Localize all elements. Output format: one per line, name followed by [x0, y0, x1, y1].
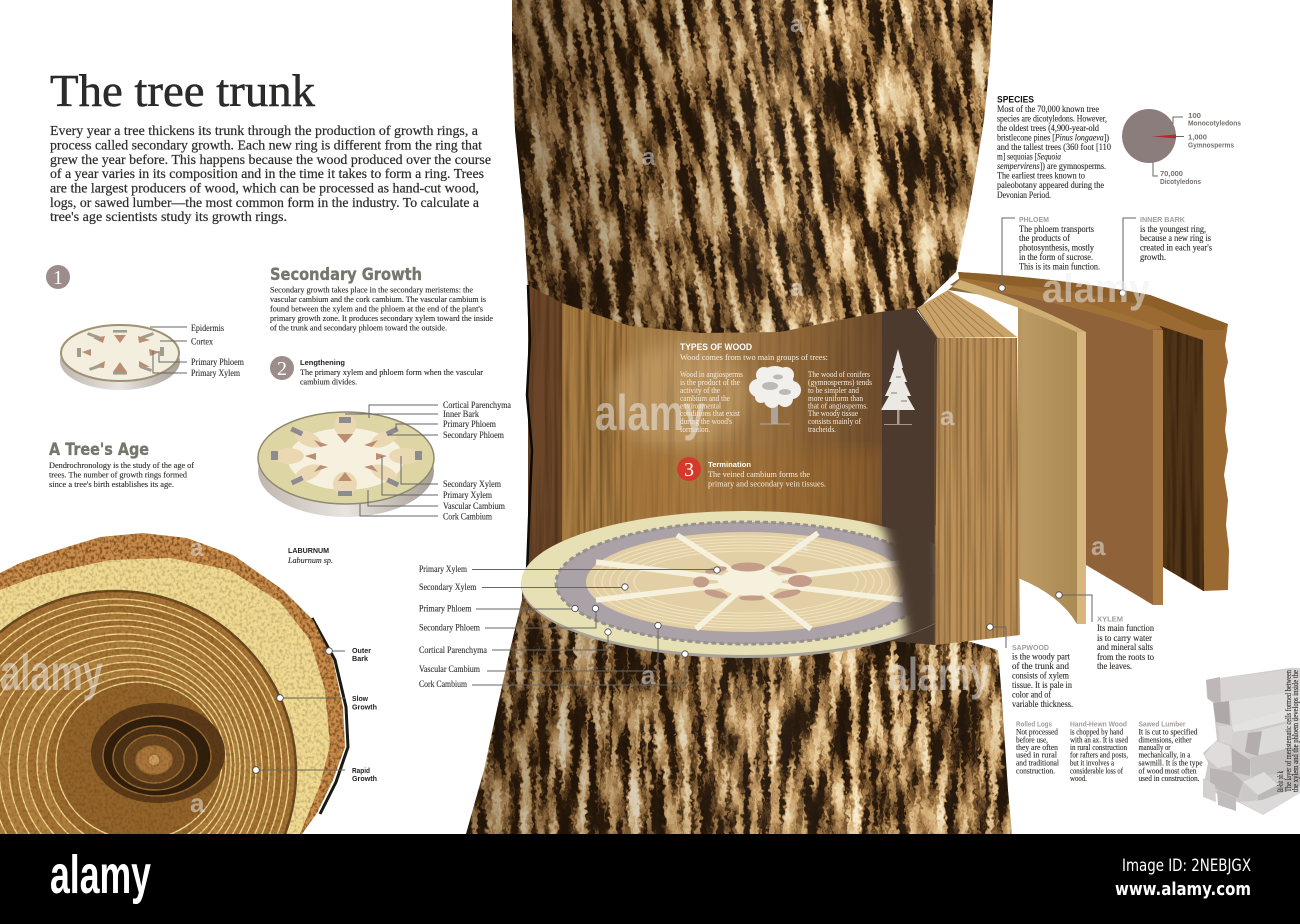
labels disc 2 — [443, 400, 511, 522]
text: hand-hewn wood: with an ax. It is used — [1070, 736, 1128, 744]
text: hand-hewn wood: but it involves a — [1070, 758, 1114, 768]
species text: sempervirens]) are gymnosperms. — [997, 161, 1106, 171]
illustration: stacked lumber — [1203, 668, 1300, 815]
panel: tree ring cross-section — [0, 533, 377, 834]
secondary growth text — [270, 286, 493, 332]
label: Laburnum — [287, 546, 333, 565]
intro text block: logs, or sawed lumber—the most common form in the industry. To calculate a — [50, 196, 480, 211]
ring callouts: Slow — [352, 694, 368, 703]
label: Epidermis: Epidermis — [191, 323, 224, 333]
callout: sapwood — [987, 624, 1073, 709]
callout: inner bark: because a new ring is — [1140, 233, 1211, 243]
heading: Secondary Growth: Secondary Growth — [270, 265, 422, 285]
conifer text: consists mainly of — [808, 417, 861, 426]
lengthening text — [300, 358, 483, 386]
badge 1 — [46, 265, 70, 289]
trunk disc callouts: Primary Phloem — [419, 604, 472, 614]
callout: xylem: is to carry water — [1097, 633, 1152, 643]
xylem layer — [948, 280, 1086, 624]
cutaway left black edge — [526, 285, 532, 600]
watermarks: alamy — [0, 645, 103, 701]
callout: sapwood: consists of xylem — [1012, 670, 1069, 680]
pie chart: tree species: Monocotyledons — [1188, 118, 1241, 128]
callout: sapwood: is the woody part — [1012, 652, 1070, 662]
text: hand-hewn wood — [1070, 720, 1128, 783]
leader lines disc 1 — [150, 327, 187, 373]
badge 1: 1 — [53, 267, 63, 289]
icon: conifer tree — [881, 349, 915, 424]
species text: m] sequoias [Sequoia — [997, 152, 1061, 162]
text: sawed lumber: Sawed Lumber — [1138, 720, 1186, 728]
callout: xylem: and mineral salts — [1097, 642, 1153, 652]
disc 2 drawing — [258, 412, 434, 517]
upper trunk bark — [512, 0, 993, 333]
callout: xylem — [1056, 592, 1154, 671]
slab rings — [0, 533, 345, 834]
callout: inner bark: is the youngest ring, — [1140, 224, 1206, 234]
footer bar — [0, 834, 1300, 924]
callout: xylem: XYLEM — [1097, 614, 1123, 624]
labels disc 2: Cork Cambium — [443, 512, 492, 522]
ring callouts: Outer — [352, 646, 371, 655]
angiosperm text: conditions that exist — [680, 409, 741, 418]
panel: peeled wood layers — [917, 272, 1229, 648]
intro text block: are the largest producers of wood, which can be processed as hand-cut wood, — [50, 182, 479, 196]
species text: Devonian Period. — [997, 190, 1051, 200]
labels disc 2: Vascular Cambium — [443, 501, 505, 511]
watermarks: a — [1091, 531, 1106, 561]
secondary growth text: primary growth zone. It produces secondary xylem toward the inside — [270, 314, 493, 323]
phloem layer — [950, 278, 1163, 605]
tree age text — [49, 461, 194, 489]
badge 3: 3 — [684, 459, 694, 481]
text: sawed lumber — [1138, 720, 1203, 783]
callout: phloem: photosynthesis, mostly — [1019, 242, 1094, 252]
text: rolled logs: used in rural — [1016, 750, 1058, 760]
title: The tree trunk — [50, 65, 315, 116]
watermarks: a — [790, 275, 804, 302]
badge 3 — [677, 457, 701, 481]
badge 2: 2 — [277, 358, 287, 380]
trunk disc callouts: Secondary Xylem — [419, 582, 476, 592]
panel: types of wood — [677, 342, 915, 488]
text: rolled logs: they are often — [1016, 743, 1058, 752]
trunk disc callouts: Primary Xylem — [419, 564, 467, 574]
angiosperm text: formation. — [680, 425, 710, 434]
tree age text: trees. The number of growth rings formed — [49, 470, 187, 480]
text: sawed lumber: manually or — [1138, 743, 1171, 752]
trunk disc callouts — [419, 564, 720, 689]
watermarks — [0, 11, 1151, 818]
text: sawed lumber: of wood most often — [1138, 766, 1196, 776]
text: rolled logs: and traditional — [1016, 758, 1060, 768]
species text: Most of the 70,000 known tree — [997, 104, 1099, 114]
intro text block: of a year varies in its composition and in the time it takes to form a ring. Trees — [50, 167, 484, 182]
label: Primary Xylem: Primary Xylem — [191, 368, 240, 378]
watermarks: a — [795, 530, 809, 557]
species text: species are dicotyledons. However, — [997, 114, 1107, 124]
pie chart: tree species — [1122, 109, 1241, 186]
callout: inner bark: growth. — [1140, 252, 1166, 262]
pie chart: tree species: Dicotyledons — [1160, 177, 1201, 186]
angiosperm text: is the product of the — [680, 378, 740, 387]
conifer text: tracheids. — [808, 425, 836, 434]
watermarks: alamy — [595, 385, 705, 441]
site url: www.alamy.com — [1115, 879, 1251, 900]
text: sawed lumber: dimensions, either — [1138, 736, 1192, 744]
lengthening text: The primary xylem and phloem form when the vascular — [300, 368, 483, 377]
bark layer — [958, 272, 1229, 594]
rotated note — [1276, 670, 1300, 792]
watermarks: a — [940, 401, 955, 431]
callout: phloem: the products of — [1019, 233, 1070, 243]
text: sawed lumber: used in construction. — [1138, 774, 1200, 783]
panel: stage 1 diagram — [60, 323, 244, 390]
termination text: The veined cambium forms the — [708, 470, 810, 479]
pie chart: tree species: 70,000 — [1160, 169, 1183, 178]
callout: sapwood: variable thickness. — [1012, 699, 1073, 709]
conifer text: (gymnosperms) tends — [808, 378, 872, 387]
watermarks: alamy — [1042, 267, 1151, 311]
labels disc 2: Secondary Xylem — [443, 479, 501, 489]
trunk disc callouts: Secondary Phloem — [419, 622, 480, 632]
text: rolled logs — [1016, 720, 1060, 776]
text: rolled logs: Rolled Logs — [1016, 720, 1052, 728]
angiosperm text: cambium and the — [680, 394, 730, 403]
callout: inner bark: created in each year's — [1140, 242, 1212, 252]
callout: sapwood: tissue. It is pale in — [1012, 680, 1072, 690]
angiosperm text: activity of the — [680, 386, 720, 395]
callout: xylem: Its main function — [1097, 623, 1154, 633]
intro text block: tree's age scientists study its growth rings. — [50, 210, 287, 225]
angiosperm text: environmental — [680, 402, 722, 410]
labels disc 2: Secondary Phloem — [443, 430, 504, 440]
text: hand-hewn wood: is chopped by hand — [1070, 728, 1123, 736]
ring callouts — [253, 646, 377, 783]
intro text block: grew the year before. This happens because the wood produced over the course — [50, 153, 491, 168]
callout: xylem: the leaves. — [1097, 661, 1132, 671]
trunk disc callouts: Vascular Cambium — [419, 664, 480, 674]
sapwood block — [917, 290, 1023, 648]
species text — [997, 94, 1111, 200]
callout: sapwood: of the trunk and — [1012, 661, 1069, 671]
text: hand-hewn wood: in rural construction — [1070, 743, 1127, 752]
panel: stage 2 diagram — [258, 400, 511, 522]
text: sawed lumber: It is cut to specified — [1138, 728, 1198, 736]
species text: and the tallest trees (360 foot [110 — [997, 142, 1111, 152]
angiosperm text: Wood in angiosperms — [680, 370, 743, 379]
conifer text: more uniform than — [808, 394, 863, 403]
labels disc 2: Primary Xylem — [443, 490, 492, 500]
species text: bristlecone pines [Pinus longaeva]) — [997, 132, 1109, 142]
leader lines disc 2 — [345, 405, 438, 516]
cutaway interior walls — [528, 280, 938, 650]
conifer text: to be simpler and — [808, 386, 859, 395]
callout: xylem: from the roots to — [1097, 652, 1154, 662]
intro text block: Every year a tree thickens its trunk through the production of growth rings, a — [50, 124, 479, 139]
ring callouts: Bark — [352, 654, 369, 663]
callout: phloem: PHLOEM — [1019, 215, 1049, 224]
disc 1 drawing — [60, 325, 180, 390]
tree age text: Dendrochronology is the study of the age of — [49, 461, 194, 470]
species text: The earliest trees known to — [997, 170, 1085, 180]
panel: trunk with cutaway — [408, 0, 1092, 845]
secondary growth text: Secondary growth takes place in the secondary meristems: the — [270, 286, 473, 294]
pie chart: tree species: Gymnosperms — [1188, 140, 1234, 150]
intro text block — [50, 124, 491, 225]
species text: paleobotany appeared during the — [997, 180, 1104, 190]
conifer text — [808, 370, 872, 434]
text: hand-hewn wood: for rafters and posts, — [1070, 750, 1128, 760]
heading: types of wood: TYPES OF WOOD — [680, 342, 752, 352]
text: hand-hewn wood: wood. — [1070, 774, 1087, 783]
pie chart: tree species: 1,000 — [1188, 132, 1207, 142]
conifer text: The wood of conifers — [808, 370, 870, 379]
species text: SPECIES — [997, 94, 1034, 104]
text: hand-hewn wood: Hand-Hewn Wood — [1070, 720, 1127, 728]
labels disc 2: Cortical Parenchyma — [443, 400, 511, 410]
watermarks: a — [641, 660, 656, 690]
watermarks: a — [790, 11, 804, 38]
callout: phloem: This is its main function. — [1019, 262, 1100, 272]
ring callouts: Growth — [352, 702, 377, 712]
subheading: Wood comes from two main groups of trees: — [680, 353, 828, 362]
inner wall — [868, 308, 937, 638]
rotated note: the xylem and the phloem develops inside the — [1291, 670, 1300, 792]
termination text: primary and secondary vein tissues. — [708, 480, 826, 488]
callout: sapwood: color and of — [1012, 690, 1051, 700]
labels disc 2: Primary Phloem — [443, 419, 496, 429]
heading: A Tree's Age: A Tree's Age — [49, 440, 149, 460]
cross-section disc on the cutaway — [521, 511, 969, 658]
label: Cortex: Cortex — [191, 336, 213, 346]
secondary growth text: of the trunk and secondary phloem toward the outside. — [270, 324, 447, 332]
text: rolled logs: before use, — [1016, 736, 1048, 744]
lengthening text: cambium divides. — [300, 378, 357, 386]
secondary growth text: vascular cambium and the cork cambium. The vascular cambium is — [270, 295, 486, 304]
icon: broadleaf tree — [749, 366, 801, 424]
lower trunk bark — [466, 592, 1012, 834]
text: sawed lumber: mechanically, in a — [1138, 750, 1191, 760]
angiosperm text — [680, 370, 743, 434]
watermarks: a — [190, 788, 205, 818]
slab dark rim — [312, 618, 348, 814]
trunk disc callouts: Cortical Parenchyma — [419, 645, 487, 655]
ring callouts: Growth — [352, 774, 377, 783]
rotated note: The layer of meristematic cells formed between — [1284, 670, 1293, 792]
watermarks: a — [190, 535, 204, 562]
callout: phloem: The phloem transports — [1019, 224, 1094, 234]
badge 2 — [270, 356, 294, 380]
conifer text: The woody tissue — [808, 409, 858, 418]
conifer text: that of angiosperms. — [808, 402, 868, 410]
intro text block: process called secondary growth. Each new ring is different from the ring that — [50, 138, 482, 154]
callout: sapwood: SAPWOOD — [1012, 643, 1049, 652]
text: rolled logs: Not processed — [1016, 728, 1058, 736]
termination text: Termination — [708, 460, 751, 469]
tree age text: since a tree's birth establishes its age. — [49, 480, 174, 489]
watermarks: alamy — [888, 648, 990, 700]
angiosperm text: during the wood's — [680, 417, 732, 426]
labels disc 2: Inner Bark — [443, 409, 479, 419]
rotated note: Bi-bit ph k — [1276, 771, 1285, 792]
text: sawed lumber: sawmill. It is the type — [1138, 758, 1203, 768]
pie chart: tree species: 100 — [1188, 111, 1201, 120]
termination text — [708, 460, 826, 488]
callout: phloem: in the form of sucrose. — [1019, 252, 1093, 262]
watermarks: a — [642, 144, 656, 171]
label: Laburnum: Laburnum sp. — [287, 556, 333, 565]
callout: inner bark — [1119, 215, 1212, 296]
trunk disc callouts: Cork Cambium — [419, 679, 467, 689]
image id: Image ID: 2NEBJGX — [1122, 856, 1251, 876]
logo: alamy: alamy — [50, 845, 151, 905]
species text: the oldest trees (4,900-year-old — [997, 123, 1099, 133]
ring callouts: Rapid — [352, 766, 370, 775]
callout: phloem — [999, 215, 1100, 291]
callout: inner bark: INNER BARK — [1140, 215, 1185, 224]
lengthening text: Lengthening — [300, 358, 345, 367]
text: hand-hewn wood: considerable loss of — [1070, 766, 1123, 776]
text: rolled logs: construction. — [1016, 766, 1055, 776]
secondary growth text: found between the xylem and the phloem at the end of the plant's — [270, 304, 483, 314]
label: Laburnum: LABURNUM — [288, 546, 329, 555]
label: Primary Phloem: Primary Phloem — [191, 357, 244, 367]
